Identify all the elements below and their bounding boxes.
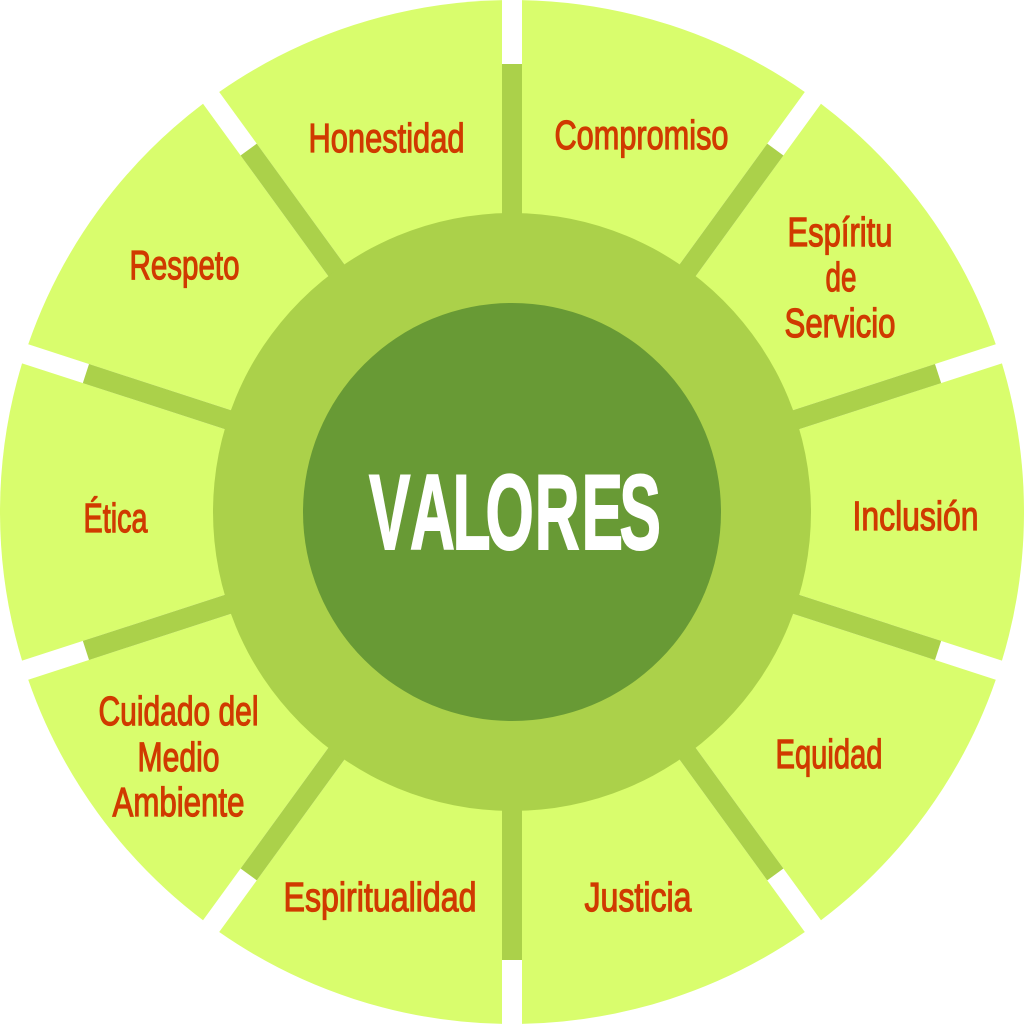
panel: Inclusión: Inclusión: [852, 493, 978, 539]
center circle: [303, 303, 721, 721]
panel: Cuidado del Medio Ambiente: Ambiente: [112, 779, 244, 825]
panel: Equidad: Equidad: [776, 731, 882, 777]
panel: Cuidado del Medio Ambiente: [28, 531, 486, 920]
panel: Honestidad: [219, 0, 502, 481]
panel: Espíritu de Servicio: de: [826, 254, 856, 300]
panel: Espíritu de Servicio: Espíritu: [788, 209, 892, 255]
middle ring: [213, 213, 811, 811]
title: VALORES: VALORES: [369, 452, 661, 572]
panel: Equidad: [538, 531, 996, 920]
panel: Compromiso: Compromiso: [554, 112, 728, 158]
panel: Compromiso: [522, 0, 805, 481]
panel: Respeto: [28, 104, 486, 493]
panel: Espíritu de Servicio: Servicio: [784, 300, 896, 346]
panel: Justicia: Justicia: [584, 874, 692, 920]
panel: Respeto: Respeto: [130, 242, 240, 288]
panel: Justicia: [522, 543, 805, 1024]
spokes between segments: [83, 64, 941, 960]
panel: Espiritualidad: Espiritualidad: [284, 874, 476, 920]
panel: Cuidado del Medio Ambiente: Medio: [138, 734, 220, 780]
panel: Honestidad: Honestidad: [308, 115, 464, 161]
panel: Espíritu de Servicio: [538, 104, 996, 493]
panel: Ética: [0, 363, 480, 661]
panel: Cuidado del Medio Ambiente: Cuidado del: [98, 688, 258, 734]
panel: Espiritualidad: [219, 543, 502, 1024]
panel: Ética: Ética: [84, 495, 148, 541]
panel: Inclusión: [544, 363, 1024, 661]
